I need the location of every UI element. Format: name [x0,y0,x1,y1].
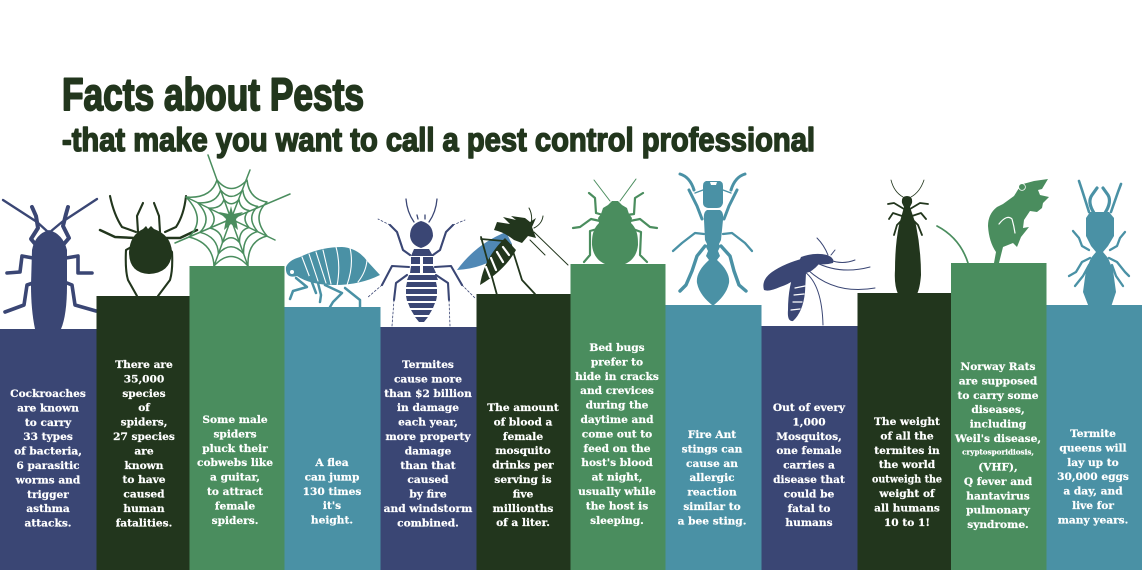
text: fleas fact: 130 times [303,486,361,498]
icon: fire ant [673,174,752,305]
text: termite damage fact: each year, [398,417,458,429]
text: bed bugs fact: feed on the [584,443,651,455]
text: termite damage fact: and windstorm [384,503,472,515]
bar: termite queens [1046,305,1142,570]
icon: striped mosquito [457,208,568,295]
text: male spiders fact: pluck their [202,443,268,455]
text: fleas fact: height. [311,515,353,527]
text: norway rats fact: (VHF), [978,462,1018,474]
text: mosquito blood fact: serving is [494,474,552,486]
text: spiders fact: caused [123,489,165,501]
text: male spiders fact: spiders. [212,515,258,527]
text: termite damage fact: damage [405,445,452,457]
text: cockroaches fact: 33 types [23,431,73,443]
text: fire ants fact: stings can [682,443,743,455]
text: cockroaches fact: are known [17,402,79,414]
panel: spiders [96,196,197,570]
text: spiders fact: species [122,388,166,400]
text: bed bugs fact: daytime and [581,414,654,426]
text: fire ants fact: Fire Ant [688,429,736,441]
text: termite damage fact: than that [400,460,456,472]
text: fire ants fact: allergic [689,472,735,484]
icon: soldier termite [1069,181,1129,315]
text: fire ants fact: a bee sting. [678,515,746,527]
text: termite queens fact: 30,000 eggs [1057,471,1129,483]
text: norway rats fact: syndrome. [967,519,1029,531]
icon: navy mosquito [763,238,875,325]
text: male spiders fact: cobwebs like [197,457,273,469]
text: bed bugs fact: come out to [582,428,652,440]
text: termite damage fact: cause more [394,373,462,385]
text: mosquitos fact: one female [776,445,842,457]
bar: bed bugs [570,264,666,570]
text: fleas fact: it's [323,500,341,512]
text: termite weight fact: outweigh the [872,474,942,486]
bar: mosquitos [762,326,858,570]
text: bed bugs fact: sleeping. [590,515,644,527]
panel: fire ants [666,174,762,570]
panel: termite damage [367,199,476,570]
panel: bed bugs [570,179,666,570]
text: bed bugs fact: at night, [592,472,642,484]
text: spiders fact: 27 species [113,431,175,443]
text: male spiders fact: to attract [207,486,263,498]
text: termite weight fact: weight of [878,488,936,500]
text: cockroaches fact: trigger [27,489,69,501]
text: spiders fact: human [123,503,165,515]
text: spiders fact: known [125,460,164,472]
text: mosquito blood fact: female [503,431,543,443]
text: norway rats fact: diseases, [971,404,1025,416]
text: mosquitos fact: 1,000 [792,416,826,428]
icon: cockroach [3,199,97,329]
text: spiders fact: to have [122,474,166,486]
text: termite weight fact: of all the [880,430,934,442]
text: termite queens fact: a day, and [1063,486,1123,498]
text: mosquitos fact: fatal to [788,503,830,515]
text: mosquito blood fact: drinks per [492,460,554,472]
panel: norway rats [937,179,1049,570]
text: mosquito blood fact: of blood a [494,416,553,428]
text: cockroaches fact: 6 parasitic [16,460,80,472]
bar: fleas [284,307,380,570]
text: bed bugs fact: usually while [578,486,656,498]
text: cockroaches fact: attacks. [25,518,71,530]
text: termite queens fact: Termite [1070,428,1116,440]
text: norway rats fact: hantavirus [966,490,1030,502]
icon: winged termite [888,180,928,294]
text: bed bugs fact: Bed bugs [589,342,645,354]
text: cockroaches fact: Cockroaches [10,388,86,400]
text: termite damage fact: caused [407,474,449,486]
text: male spiders fact: spiders [213,428,257,440]
text: termite weight fact: The weight [874,416,940,428]
text: termite weight fact: 10 to 1! [884,517,930,529]
text: mosquito blood fact: five [513,488,534,500]
text: termite queens fact: many years. [1058,514,1128,526]
panel: cockroaches [0,199,97,570]
text: mosquitos fact: Out of every [773,402,846,414]
text: bed bugs fact: and crevices [580,385,654,397]
text: bed bugs fact: hide in cracks [575,371,659,383]
text: termite queens fact: live for [1072,500,1114,512]
text: fire ants fact: similar to [683,501,741,513]
text: spiders fact: of [138,402,151,414]
bar: male spiders [190,266,284,570]
bar: termite weight [858,293,951,570]
bar: norway rats [951,263,1046,570]
text: bed bugs fact: prefer to [591,356,643,368]
text: termite weight fact: termites in [874,445,940,457]
title [62,69,815,158]
text: cockroaches fact: to carry [25,417,72,429]
panel: termite weight [858,180,951,570]
text: fleas fact: can jump [305,471,359,483]
text: bed bugs fact: the host is [586,500,648,512]
bar: termite damage [380,327,476,570]
text: norway rats fact: Q fever and [964,476,1033,488]
text: mosquitos fact: disease that [773,474,845,486]
text: cockroaches fact: of bacteria, [14,446,82,458]
panel: termite queens [1046,181,1142,570]
panel: fleas [284,247,380,570]
text: termite damage fact: combined. [397,517,459,529]
title: Facts about Pests [62,69,364,120]
text: spiders fact: 35,000 [124,373,164,385]
text: termite damage fact: in damage [397,402,459,414]
panel: male spiders [175,155,290,570]
text: norway rats fact: are supposed [959,375,1038,387]
icon: termite [367,199,475,326]
bar: spiders [96,296,190,570]
text: bed bugs fact: during the [586,400,649,412]
icon: spider [100,196,197,296]
text: mosquitos fact: carries a [783,460,835,472]
text: termite queens fact: lay up to [1067,457,1119,469]
text: termite damage fact: by fire [409,489,447,501]
text: termite damage fact: than $2 billion [384,388,472,400]
text: termite damage fact: Termites [402,359,454,371]
text: norway rats fact: to carry some [958,390,1039,402]
text: mosquito blood fact: of a liter. [496,517,550,529]
bar: mosquito blood [476,294,570,570]
text: mosquito blood fact: The amount [487,402,559,414]
text: male spiders fact: female [215,500,255,512]
title: -that make you want to call a pest control professional [62,121,815,158]
text: fire ants fact: reaction [687,487,737,499]
text: male spiders fact: Some male [202,414,268,426]
text: termite damage fact: more property [385,431,471,443]
text: mosquitos fact: humans [785,517,833,529]
text: norway rats fact: cryptosporidiosis, [962,448,1034,456]
text: spiders fact: spiders, [121,417,167,429]
text: norway rats fact: pulmonary [966,505,1031,517]
text: mosquito blood fact: mosquito [495,445,551,457]
panel: mosquito blood [457,208,570,570]
text: mosquitos fact: could be [784,488,834,500]
text: termite weight fact: the world [879,459,936,471]
text: spiders fact: fatalities. [116,517,172,529]
text: cockroaches fact: worms and [15,474,81,486]
icon: cobweb [175,155,290,266]
text: fleas fact: A flea [314,457,349,469]
panel: mosquitos [762,238,875,570]
text: termite weight fact: all humans [874,502,940,514]
text: termite queens fact: queens will [1059,442,1127,454]
text: male spiders fact: a guitar, [210,472,260,484]
text: spiders fact: There are [115,359,173,371]
bar: cockroaches [0,329,96,570]
text: fire ants fact: cause an [686,458,738,470]
text: norway rats fact: Norway Rats [961,361,1035,373]
text: norway rats fact: including [970,419,1027,431]
icon: rat [937,179,1049,263]
icon: flea [286,247,380,307]
text: cockroaches fact: asthma [26,503,70,515]
bar: fire ants [666,305,762,570]
text: bed bugs fact: host's blood [581,457,653,469]
text: mosquitos fact: Mosquitos, [776,431,842,443]
text: mosquito blood fact: millionths [493,503,553,515]
text: spiders fact: are [134,445,154,457]
text: norway rats fact: Weil's disease, [954,433,1041,445]
icon: bed bug [573,179,657,264]
